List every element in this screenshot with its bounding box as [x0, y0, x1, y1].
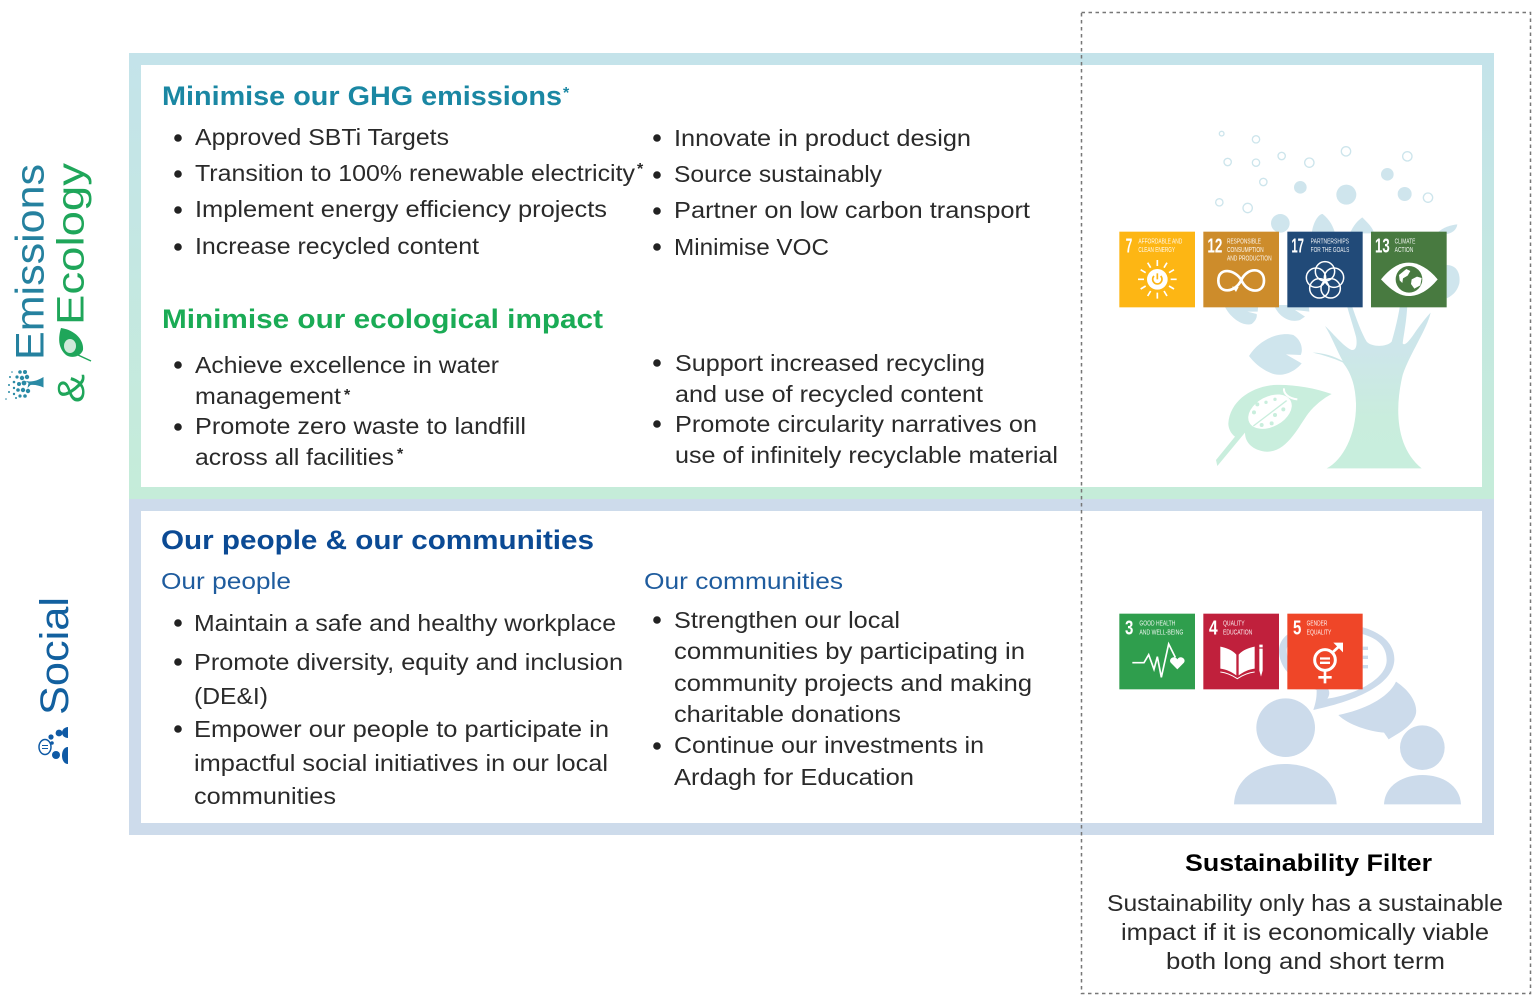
SDG 4 tile: EDUCATION — [1223, 629, 1252, 636]
bullets: ecological left column: across all facilities — [195, 444, 394, 470]
SDG 7 tile — [1119, 232, 1195, 307]
label: Social: Social — [33, 597, 77, 715]
bullets: GHG right column: Source sustainably — [674, 161, 883, 187]
label: Ecology: Ecology — [50, 163, 92, 325]
icon: tree small — [5, 370, 43, 400]
bullets: ecological left column: * — [344, 387, 351, 404]
SDG 7 tile: CLEAN ENERGY — [1138, 247, 1175, 254]
heading: sustainability filter: Sustainability Filter — [1185, 850, 1432, 877]
bullets: our communities: Ardagh for Education — [674, 764, 914, 790]
bullets: ecological right column — [653, 350, 1058, 468]
SDG 17 tile: FOR THE GOALS — [1311, 247, 1350, 254]
bullets: our people: Promote diversity, equity and inclusion — [194, 649, 623, 675]
heading: minimise ecological impact: Minimise our ecological impact — [162, 304, 603, 334]
bullets: ecological right column: and use of recycled content — [675, 381, 984, 407]
illustration: people and speech bubbles — [1234, 624, 1461, 804]
heading: minimise GHG emissions: * — [563, 85, 570, 102]
SDG 5 tile: 5 — [1293, 617, 1301, 640]
heading: minimise GHG emissions: Minimise our GHG emissions — [162, 81, 562, 111]
text: sustainability filter description — [1107, 890, 1503, 974]
heading: our people and communities: Our people & our communities — [161, 525, 594, 555]
bullets: ecological right column: Promote circularity narratives on — [675, 411, 1037, 437]
SDG 7 tile: 7 — [1126, 235, 1132, 258]
SDG 13 tile — [1371, 232, 1447, 307]
SDG 12 tile: AND PRODUCTION — [1227, 256, 1272, 263]
bullets: GHG left column — [174, 124, 644, 259]
SDG 3 tile: GOOD HEALTH — [1139, 620, 1175, 627]
leaf with ladybird — [1216, 385, 1332, 466]
bullets: our communities: Continue our investments in — [674, 732, 984, 758]
SDG 17 tile — [1287, 232, 1363, 307]
panel: social frame — [135, 505, 1488, 829]
SDG 5 tile — [1287, 614, 1363, 689]
bullets: GHG left column: Implement energy efficiency projects — [195, 196, 607, 222]
illustration: tree bubbles — [1216, 131, 1460, 298]
bullets: our people: Maintain a safe and healthy workplace — [194, 610, 616, 636]
bullets: our people: (DE&I) — [194, 683, 268, 709]
bullets: ecological left column: management — [195, 383, 342, 409]
bullets: ecological left column: Promote zero waste to landfill — [195, 413, 526, 439]
bullets: ecological left column — [174, 352, 526, 470]
SDG 3 tile — [1119, 614, 1195, 689]
bullets: our communities: communities by participating in — [674, 638, 1025, 664]
bullets: ecological right column: use of infinitely recyclable material — [675, 442, 1058, 468]
subheading: our communities: Our communities — [644, 568, 843, 594]
bullets: GHG right column — [653, 125, 1031, 260]
bullets: our communities — [653, 607, 1032, 790]
icon: leaf small — [59, 328, 91, 361]
bullets: GHG right column: Partner on low carbon transport — [674, 197, 1031, 223]
icon: people small — [39, 727, 68, 764]
SDG 13 tile: 13 — [1375, 235, 1390, 258]
bullets: our communities: community projects and making — [674, 670, 1032, 696]
panel: emissions and ecology frame — [135, 59, 1488, 493]
bullets: GHG left column: Transition to 100% renewable electricity — [195, 160, 636, 186]
bullets: GHG left column: * — [637, 161, 644, 178]
illustration: tree trunk and leaves — [1216, 305, 1431, 468]
SDG 4 tile — [1203, 614, 1279, 689]
bullets: GHG right column: Innovate in product design — [674, 125, 971, 151]
side label: social — [33, 597, 77, 764]
bullets: ecological right column: Support increased recycling — [675, 350, 985, 376]
SDG 17 tile: 17 — [1291, 235, 1304, 258]
subheading: our people: Our people — [161, 568, 291, 594]
bullets: our people: impactful social initiatives in our local — [194, 750, 608, 776]
SDG 7 tile: AFFORDABLE AND — [1138, 238, 1182, 245]
label: &: & — [51, 374, 93, 403]
sustainability filter dashed outline — [1082, 12, 1530, 994]
text: sustainability filter description: Sustainability only has a sustainable — [1107, 890, 1503, 916]
bullets: our communities: Strengthen our local — [674, 607, 900, 633]
side label: emissions and ecology — [5, 163, 93, 403]
SDG 17 tile: PARTNERSHIPS — [1311, 238, 1349, 245]
text: sustainability filter description: impact if it is economically viable — [1121, 919, 1489, 945]
SDG 5 tile: GENDER — [1307, 620, 1327, 627]
leaves — [1224, 305, 1309, 375]
SDG 12 tile: CONSUMPTION — [1227, 247, 1264, 254]
bullets: GHG left column: Approved SBTi Targets — [195, 124, 449, 150]
tree trunk — [1313, 305, 1431, 468]
label: Emissions: Emissions — [8, 164, 52, 360]
SDG 3 tile: AND WELL-BEING — [1139, 629, 1183, 636]
SDG 4 tile: 4 — [1209, 617, 1218, 640]
SDG 12 tile: 12 — [1207, 235, 1222, 258]
SDG 13 tile: ACTION — [1395, 247, 1413, 254]
SDG 4 tile: QUALITY — [1223, 620, 1245, 627]
bullets: ecological left column: * — [397, 446, 404, 463]
bullets: our people: communities — [194, 783, 336, 809]
bullets: our people — [174, 610, 623, 809]
bullets: GHG right column: Minimise VOC — [674, 234, 829, 260]
bullets: ecological left column: Achieve excellence in water — [195, 352, 499, 378]
SDG 13 tile: CLIMATE — [1395, 238, 1416, 245]
text: sustainability filter description: both long and short term — [1166, 948, 1445, 974]
SDG 5 tile: EQUALITY — [1307, 629, 1332, 636]
bullets: our people: Empower our people to participate in — [194, 716, 609, 742]
SDG 12 tile — [1203, 232, 1279, 307]
bullets: our communities: charitable donations — [674, 701, 901, 727]
bullets: GHG left column: Increase recycled content — [195, 233, 480, 259]
SDG 3 tile: 3 — [1125, 617, 1133, 640]
SDG 12 tile: RESPONSIBLE — [1227, 238, 1261, 245]
SDG tiles: social — [1119, 614, 1363, 689]
SDG tiles: emissions and ecology — [1119, 232, 1447, 307]
